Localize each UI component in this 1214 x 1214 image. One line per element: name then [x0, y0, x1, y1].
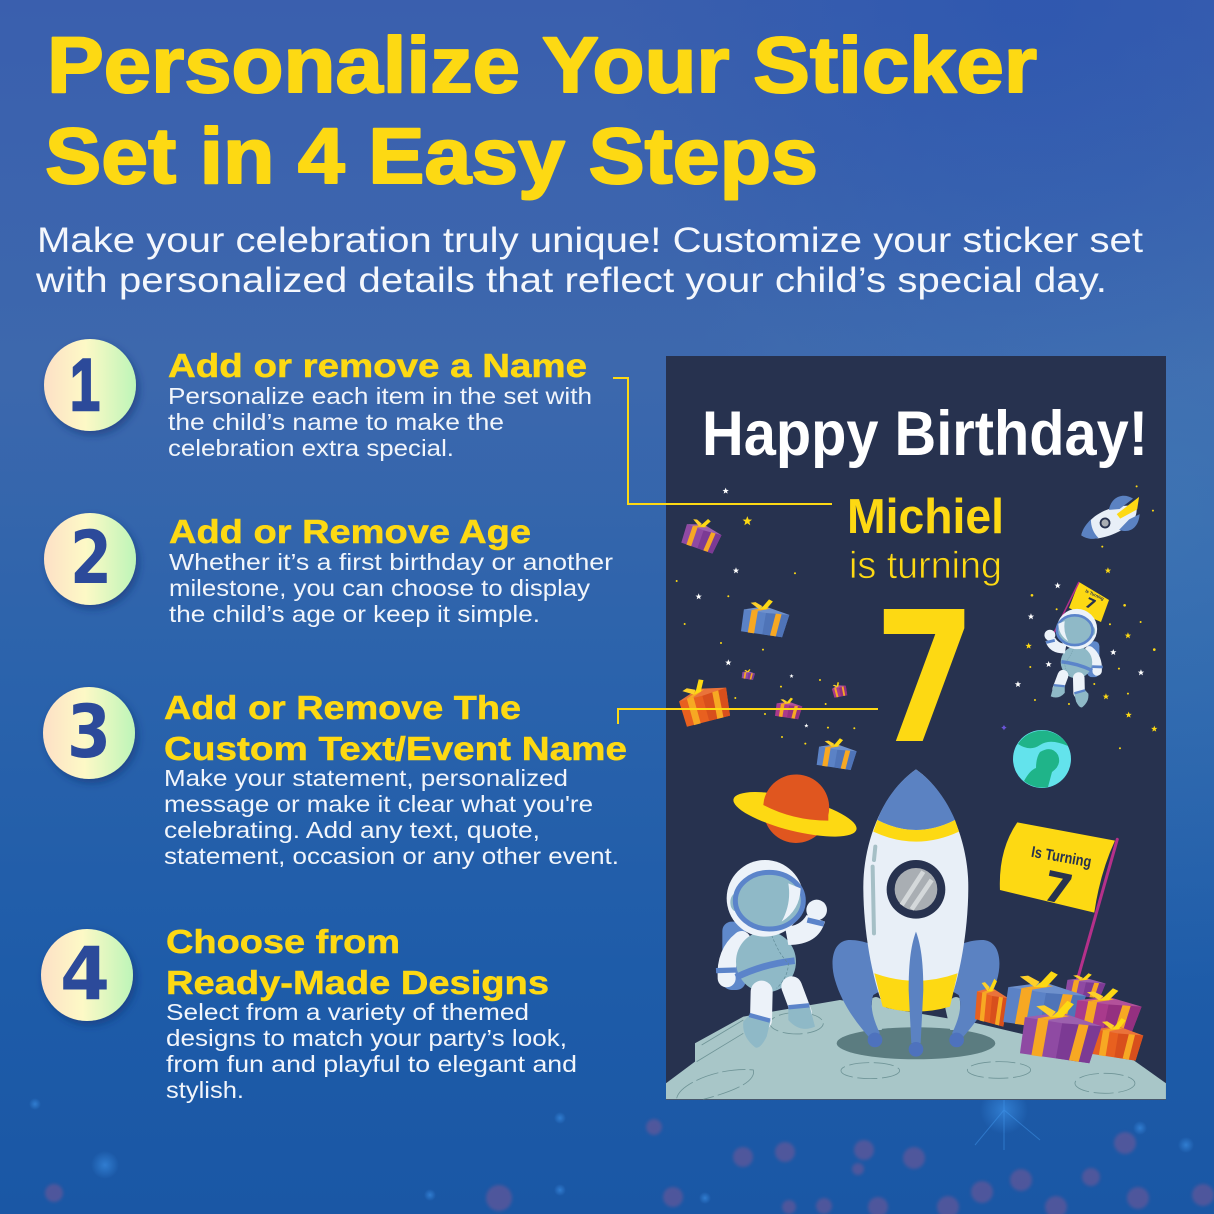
step 2 description: the child’s age or keep it simple. — [169, 601, 540, 627]
step 3 heading: Add or Remove The — [164, 689, 521, 726]
step 3 description: celebrating. Add any text, quote, — [164, 817, 540, 843]
icon: small rocket — [1074, 491, 1147, 544]
step 3 description: statement, occasion or any other event. — [164, 843, 619, 869]
small flag: 7 — [1082, 595, 1098, 614]
title: Personalize Your Sticker — [47, 20, 1037, 109]
step 4 badge: 4 — [60, 932, 110, 1017]
step 1 description: Personalize each item in the set with — [168, 383, 592, 409]
step 2 badge: 2 — [70, 516, 112, 601]
step 4 heading: Ready-Made Designs — [166, 964, 549, 1001]
step 3 description: message or make it clear what you're — [164, 791, 593, 817]
step 1 — [44, 339, 592, 461]
small flag: Is Turning — [1085, 588, 1105, 601]
poster greeting: Happy Birthday! — [702, 399, 1148, 469]
poster: birthday sticker preview — [613, 356, 1166, 1100]
icon: flag with age: 7 — [1039, 861, 1077, 915]
step 3 badge: 3 — [67, 690, 111, 775]
poster age number: 7 — [874, 573, 976, 784]
step 3 — [43, 687, 627, 869]
icon: flag with age — [1000, 822, 1117, 980]
title: Set in 4 Easy Steps — [45, 111, 818, 200]
step 2 heading: Add or Remove Age — [169, 513, 531, 550]
intro text: Make your celebration truly unique! Customize your sticker set — [37, 221, 1143, 260]
step 4 description: Select from a variety of themed — [166, 999, 529, 1025]
step 1 badge — [44, 339, 136, 431]
step 4 badge — [41, 929, 133, 1021]
step 1 description — [168, 383, 592, 461]
step 3 badge — [43, 687, 135, 779]
intro text — [35, 221, 1143, 300]
callout leader lines — [613, 378, 878, 724]
step 3 heading: Custom Text/Event Name — [164, 730, 627, 767]
icon: ringed planet — [730, 774, 860, 846]
step 2 badge — [44, 513, 136, 605]
step 2 description: milestone, you can choose to display — [169, 575, 591, 601]
small flag — [1049, 582, 1109, 643]
step 4 description: from fun and playful to elegant and — [166, 1051, 577, 1077]
step 3 description: Make your statement, personalized — [164, 765, 568, 791]
stars and gifts in space — [671, 485, 1157, 770]
icon: earth planet — [1013, 730, 1071, 788]
icon: floating astronaut with flag — [1044, 582, 1109, 707]
moon surface — [666, 1000, 1166, 1099]
step 1 description: the child’s name to make the — [168, 409, 504, 435]
poster name: Michiel — [847, 490, 1004, 544]
step 4 heading: Choose from — [166, 923, 400, 960]
step 3 description — [164, 765, 619, 869]
step 3 heading — [164, 689, 627, 767]
step 1 description: celebration extra special. — [168, 435, 454, 461]
icon: rocket — [833, 769, 999, 1057]
icon: gift pile — [975, 971, 1143, 1063]
step 4 description: designs to match your party’s look, — [166, 1025, 567, 1051]
step 4 description — [166, 999, 577, 1103]
poster subtitle: is turning — [849, 545, 1002, 587]
step 1 heading: Add or remove a Name — [168, 347, 587, 384]
intro text: with personalized details that reflect your child’s special day. — [35, 261, 1107, 300]
title — [45, 20, 1037, 200]
step 1 badge: 1 — [70, 345, 100, 426]
icon: flag with age: Is Turning — [1030, 844, 1093, 871]
step 2 — [44, 513, 613, 627]
step 2 description — [169, 549, 613, 627]
step 4 description: stylish. — [166, 1077, 244, 1103]
step 2 description: Whether it’s a first birthday or another — [169, 549, 613, 575]
step 4 — [41, 923, 577, 1103]
icon: standing astronaut — [716, 860, 827, 1048]
step 4 heading — [166, 923, 549, 1001]
